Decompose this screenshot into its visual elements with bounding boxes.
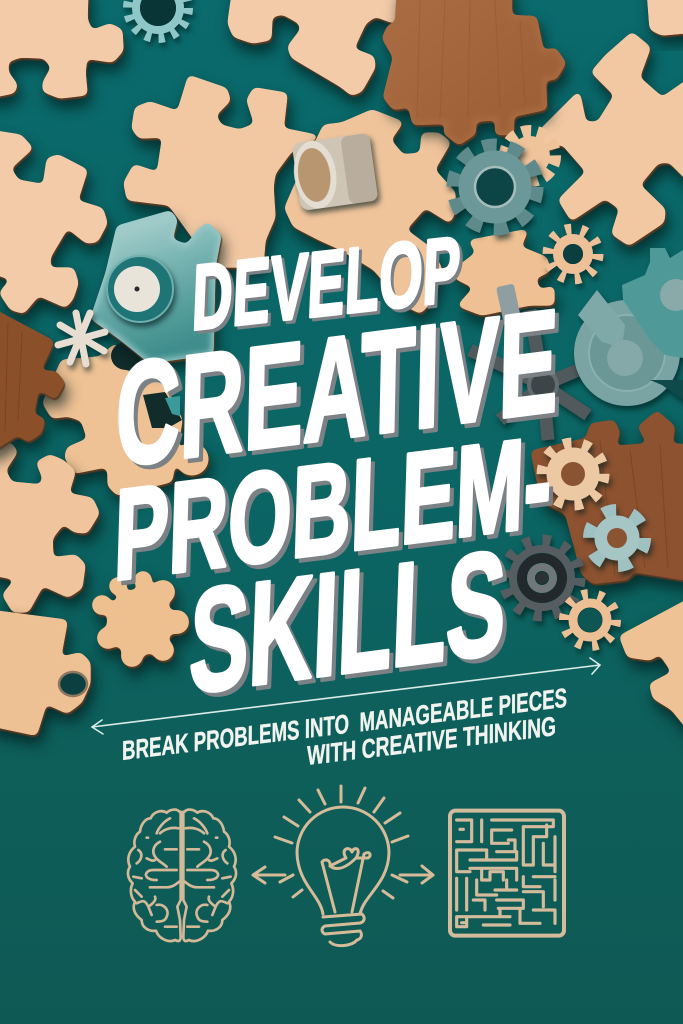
left arrow: [253, 867, 285, 883]
disc: [574, 300, 680, 406]
title line: PROBLEM-: [112, 409, 557, 612]
metal gear top: [454, 146, 536, 228]
white star cog: [58, 313, 105, 364]
piece: centre left large: [126, 78, 315, 265]
wood piece: right: [533, 413, 683, 582]
piece: bottom right: [622, 598, 683, 735]
dark counter inside C: [143, 392, 182, 428]
brain right hemisphere: [183, 810, 236, 941]
blue gear on wood: [590, 511, 644, 565]
subtitle line 2: WITH CREATIVE THINKING: [307, 710, 556, 771]
glass cylinder: [290, 133, 378, 211]
bulb base: [322, 914, 364, 946]
hub: [607, 340, 643, 376]
top teal gear: [128, 0, 188, 38]
light rays: [275, 786, 408, 898]
dark gear: [505, 541, 579, 615]
right arrow: [400, 866, 433, 883]
metal plate: [92, 212, 220, 362]
wood grain: top: [417, 0, 525, 118]
piece: top right large: [541, 35, 683, 243]
piece: round cog: [92, 571, 189, 667]
small peach gear top: [548, 229, 598, 279]
icon: light bulb: [253, 786, 433, 946]
wooden pieces: [0, 0, 683, 582]
peach gear on wood: [543, 444, 603, 504]
teal mechanism: [574, 248, 683, 406]
teal fragment inside the C: [165, 396, 180, 416]
double-headed arrow: [92, 658, 600, 734]
bulb outline: [297, 807, 389, 914]
dark spoked gear behind title: [470, 310, 590, 440]
dark gap beside C: [111, 342, 141, 370]
icon: maze: [450, 811, 564, 936]
piece: bottom left: [0, 612, 88, 733]
piece: top right small: [649, 0, 683, 33]
title: [112, 217, 564, 729]
title line: DEVELOP: DEVELOP: [190, 217, 462, 350]
title line: DEVELOP: [190, 217, 465, 353]
filament: [322, 849, 370, 912]
piece: behind glass: [287, 112, 453, 311]
grey clip: [496, 284, 522, 326]
icon: brain: [128, 810, 236, 941]
brain left hemisphere: [128, 810, 181, 941]
title line: CREATIVE: [114, 279, 564, 502]
piece: left lower: [0, 445, 97, 610]
title line: SKILLS: [187, 520, 513, 729]
ring on bottom-left piece: [59, 672, 87, 696]
piece: top left: [0, 0, 121, 96]
small peach gear bottom: [564, 594, 616, 646]
piece: middle left: [45, 346, 206, 493]
wood piece: top: [384, 0, 564, 143]
wood grain: right: [600, 440, 668, 575]
piece: centre cross: [457, 232, 552, 313]
arm: [578, 290, 625, 348]
piece: left upper: [0, 132, 105, 311]
wood piece: left: [0, 308, 63, 452]
star cog behind metal gear: [506, 132, 554, 180]
wood grain: left: [5, 322, 22, 432]
puzzle pieces: [0, 0, 683, 735]
title line: DEVELOP: DEVELOP: [193, 220, 465, 353]
subtitle: [122, 682, 567, 771]
piece: top centre: [230, 0, 396, 93]
knob on metal plate: [107, 256, 173, 322]
teal puzzle piece: [622, 248, 683, 358]
